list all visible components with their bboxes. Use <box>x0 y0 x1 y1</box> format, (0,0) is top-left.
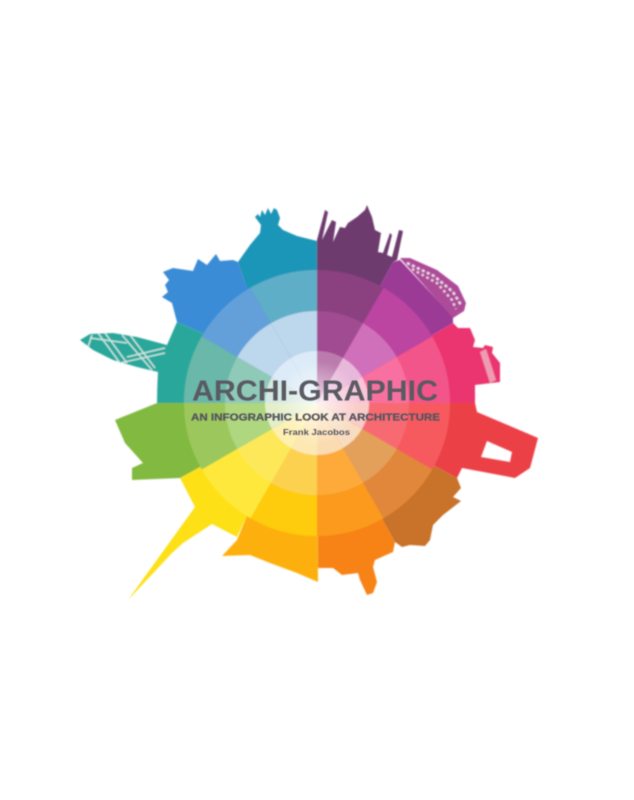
wheel sector 8 <box>202 403 317 518</box>
silhouette: gherkin tower <box>80 333 167 372</box>
author: Frank Jacobos <box>283 427 350 437</box>
wheel sector 9 <box>184 403 317 470</box>
silhouette: pink building <box>317 323 500 403</box>
cover text <box>191 376 440 437</box>
silhouette: stadium mesh <box>317 258 466 403</box>
silhouette: orange tower skyline <box>317 403 395 595</box>
wheel sector 6 <box>317 403 384 536</box>
wheel sector 11 <box>202 288 317 403</box>
wheel sector 3 <box>317 336 450 403</box>
wheel sector 10 <box>184 336 317 403</box>
silhouette: palace with chimneys <box>317 205 403 403</box>
wheel sector 2 <box>317 288 432 403</box>
colour wheel with building silhouettes <box>80 205 538 600</box>
silhouette: yellow spire <box>128 403 317 600</box>
silhouette: brown skyline <box>317 403 461 547</box>
wheel sector 7 <box>250 403 317 536</box>
title: ARCHI-GRAPHIC <box>192 376 438 408</box>
silhouette: green building <box>115 403 317 480</box>
silhouette: domed building <box>238 208 317 403</box>
wheel sector 1 <box>317 270 384 403</box>
silhouette: amber roof <box>222 403 318 582</box>
white centre glow <box>275 361 359 445</box>
wheel sector 12 <box>250 270 317 403</box>
wheel sector 5 <box>317 403 432 518</box>
silhouette: teal disc sector <box>157 322 317 403</box>
silhouette: castle towers <box>162 254 317 403</box>
wheel sector 4 <box>317 403 450 470</box>
colour wheel rings <box>184 270 450 536</box>
subtitle: AN INFOGRAPHIC LOOK AT ARCHITECTURE <box>191 412 440 424</box>
silhouette: red building with window <box>317 403 538 478</box>
